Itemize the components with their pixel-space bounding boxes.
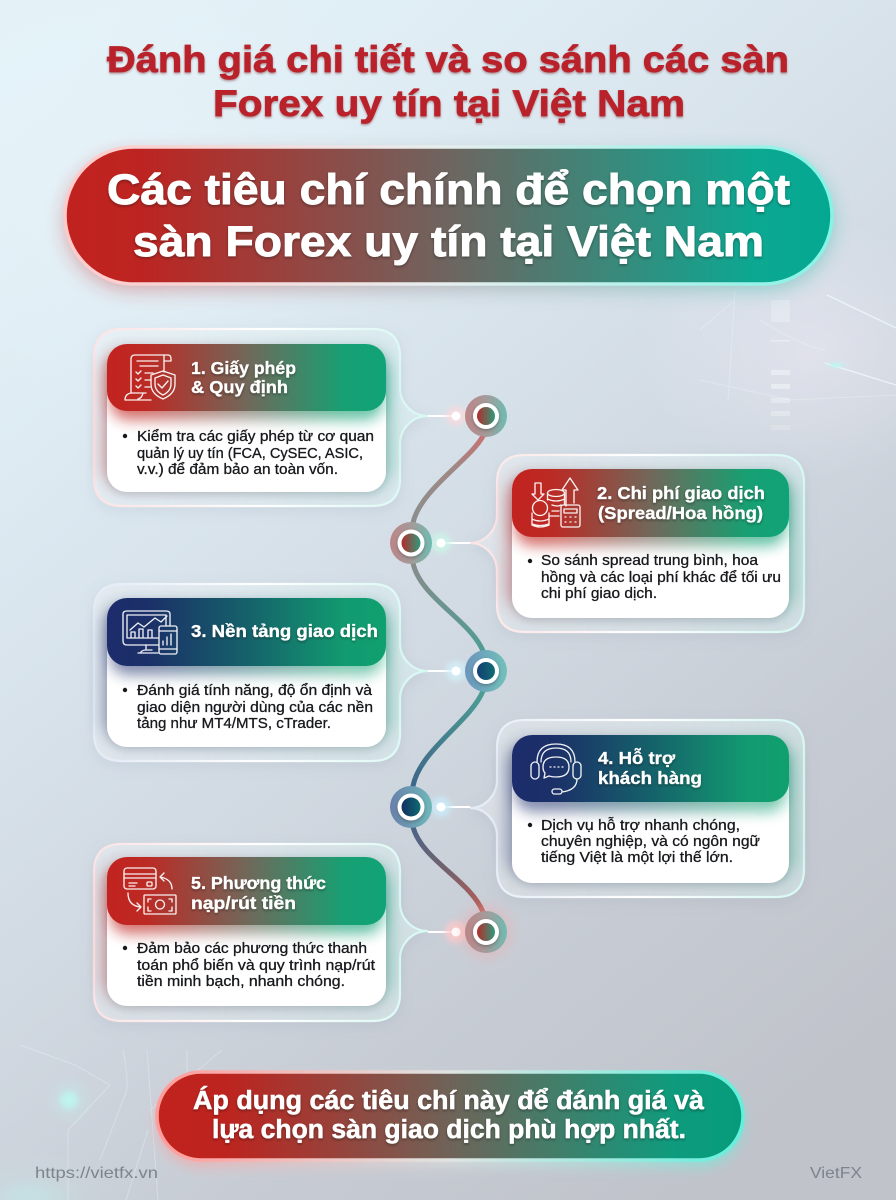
heading banner: Các tiêu chí chính để chọn một bbox=[107, 166, 790, 214]
icon: document and shield bbox=[125, 355, 175, 400]
timeline node 4 bbox=[390, 786, 451, 828]
card 1: licence: 1. Giấy phép bbox=[191, 358, 296, 378]
card 1: licence: & Quy định bbox=[191, 377, 288, 397]
card 1: licence: quản lý uy tín (FCA, CySEC, ASIC, bbox=[137, 446, 363, 462]
card 4: customer support: khách hàng bbox=[598, 768, 702, 788]
card 2: trading costs: (Spread/Hoa hồng) bbox=[598, 503, 763, 523]
card 1: licence: Kiểm tra các giấy phép từ cơ quan bbox=[137, 429, 374, 445]
card 3: platform: giao diện người dùng của các nền bbox=[137, 700, 373, 716]
card 4: customer support: 4. Hỗ trợ bbox=[598, 747, 676, 768]
timeline node 3 bbox=[446, 650, 507, 692]
card 3: platform bbox=[94, 584, 456, 761]
call to action banner bbox=[157, 1072, 743, 1166]
card 5: deposit and withdrawal: nạp/rút tiền bbox=[191, 893, 296, 913]
timeline node 5 bbox=[445, 907, 511, 957]
title: Đánh giá chi tiết và so sánh các sàn bbox=[107, 39, 789, 80]
card 1: licence bbox=[94, 329, 456, 506]
card 5: deposit and withdrawal: 5. Phương thức bbox=[191, 873, 326, 893]
card 2: trading costs: So sánh spread trung bình, hoa bbox=[541, 553, 759, 569]
timeline node 1 bbox=[446, 395, 507, 437]
card 5: deposit and withdrawal: Đảm bảo các phương thức thanh bbox=[137, 941, 367, 957]
title bbox=[107, 39, 789, 124]
icon: monitor and tablet bbox=[123, 611, 177, 654]
title: Forex uy tín tại Việt Nam bbox=[213, 83, 685, 124]
card 2: trading costs bbox=[441, 455, 804, 632]
card 5: deposit and withdrawal bbox=[94, 844, 456, 1021]
card 2: trading costs: hồng và các loại phí khác để tối ưu bbox=[541, 570, 781, 586]
timeline path bbox=[413, 436, 483, 912]
card 3: platform: Đánh giá tính năng, độ ổn định và bbox=[137, 683, 373, 699]
heading banner bbox=[65, 147, 832, 288]
call to action banner: lựa chọn sàn giao dịch phù hợp nhất. bbox=[212, 1116, 686, 1144]
card 5: deposit and withdrawal: toán phổ biến và quy trình nạp/rút bbox=[137, 958, 375, 974]
card 2: trading costs: chi phí giao dịch. bbox=[541, 586, 657, 602]
card 4: customer support bbox=[441, 720, 804, 897]
heading banner: sàn Forex uy tín tại Việt Nam bbox=[133, 218, 764, 266]
card 3: platform: 3. Nền tảng giao dịch bbox=[191, 621, 378, 641]
card 1: licence: v.v.) để đảm bảo an toàn vốn. bbox=[137, 462, 338, 478]
card 4: customer support: tiếng Việt là một lợi thế lớn. bbox=[541, 850, 733, 866]
icon: headset with chat bubble bbox=[531, 744, 581, 794]
timeline node 2 bbox=[390, 522, 451, 564]
card 4: customer support: Dịch vụ hỗ trợ nhanh chóng, bbox=[541, 817, 740, 834]
footer url: https://vietfx.vn bbox=[35, 1165, 158, 1182]
card 3: platform: tảng như MT4/MTS, cTrader. bbox=[137, 716, 331, 732]
card 5: deposit and withdrawal: tiền minh bạch, nhanh chóng. bbox=[137, 974, 345, 990]
call to action banner: Áp dụng các tiêu chí này để đánh giá và bbox=[193, 1086, 705, 1115]
icon: coins, arrows and calculator bbox=[532, 478, 580, 527]
card 4: customer support: chuyên nghiệp, và có ngôn ngữ bbox=[541, 834, 760, 850]
footer brand: VietFX bbox=[810, 1165, 862, 1182]
icon: card and cash exchange bbox=[124, 868, 176, 914]
card 2: trading costs: 2. Chi phí giao dịch bbox=[597, 483, 765, 503]
